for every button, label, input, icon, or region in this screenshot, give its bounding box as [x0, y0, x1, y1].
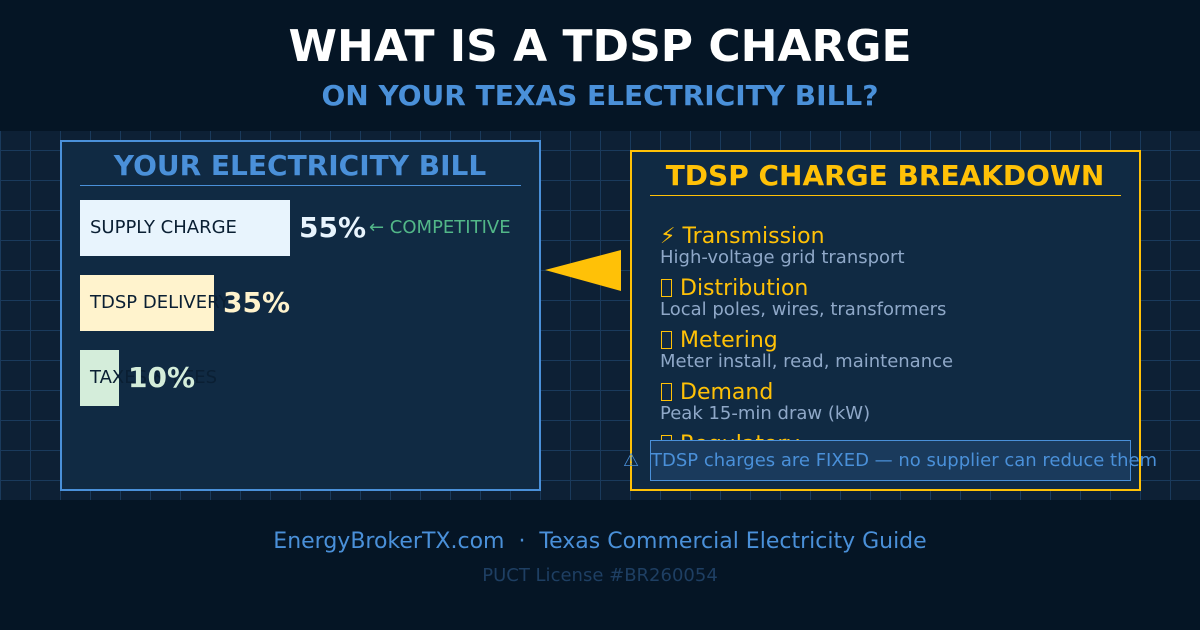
panel: tdsp charge breakdown	[631, 151, 1140, 490]
item: distribution: Local poles, wires, transformers	[660, 299, 946, 320]
item: demand: Peak 15-min draw (kW)	[660, 403, 870, 424]
title: WHAT IS A TDSP CHARGE	[288, 21, 912, 72]
item: transmission: ⚡ Transmission	[660, 224, 825, 249]
footer band	[0, 500, 1200, 630]
item: distribution: Distribution	[680, 276, 808, 301]
bar: taxes and fees: 10%	[128, 361, 195, 394]
arrow	[545, 250, 621, 291]
item: distribution	[660, 276, 946, 320]
bar: supply charge: ← COMPETITIVE	[369, 217, 511, 238]
header band	[0, 0, 1200, 131]
item: regulatory: Regulatory	[680, 432, 800, 457]
item: demand: Demand	[680, 380, 773, 405]
subtitle: ON YOUR TEXAS ELECTRICITY BILL?	[321, 79, 879, 112]
bar: tdsp delivery: TDSP DELIVERY	[89, 292, 230, 313]
item: metering	[660, 328, 953, 372]
item: metering: Meter install, read, maintenance	[660, 351, 953, 372]
item: transmission	[660, 224, 905, 268]
footer site line: EnergyBrokerTX.com · Texas Commercial Electricity Guide	[273, 529, 927, 554]
bar: supply charge	[80, 200, 511, 256]
callout box	[650, 440, 1130, 480]
item: demand	[660, 380, 870, 424]
item: transmission: High-voltage grid transport	[660, 247, 905, 268]
bar: supply charge: SUPPLY CHARGE	[90, 217, 237, 238]
bar: supply charge: 55%	[299, 211, 366, 244]
callout text: ⚠︎	[623, 450, 639, 471]
license line: PUCT License #BR260054	[482, 565, 718, 586]
bar: taxes and fees	[80, 350, 217, 406]
bar: tdsp delivery: 35%	[223, 286, 290, 319]
bar: taxes and fees: TAXES & FEES	[89, 367, 217, 388]
panel heading: tdsp charge breakdown: TDSP CHARGE BREAKDOWN	[666, 159, 1104, 192]
callout text: TDSP charges are FIXED — no supplier can reduce them	[650, 450, 1157, 471]
panel: your electricity bill	[61, 141, 540, 490]
bar: tdsp delivery	[80, 275, 290, 331]
item: metering: Metering	[680, 328, 778, 353]
panel heading: your electricity bill: YOUR ELECTRICITY BILL	[113, 149, 486, 182]
